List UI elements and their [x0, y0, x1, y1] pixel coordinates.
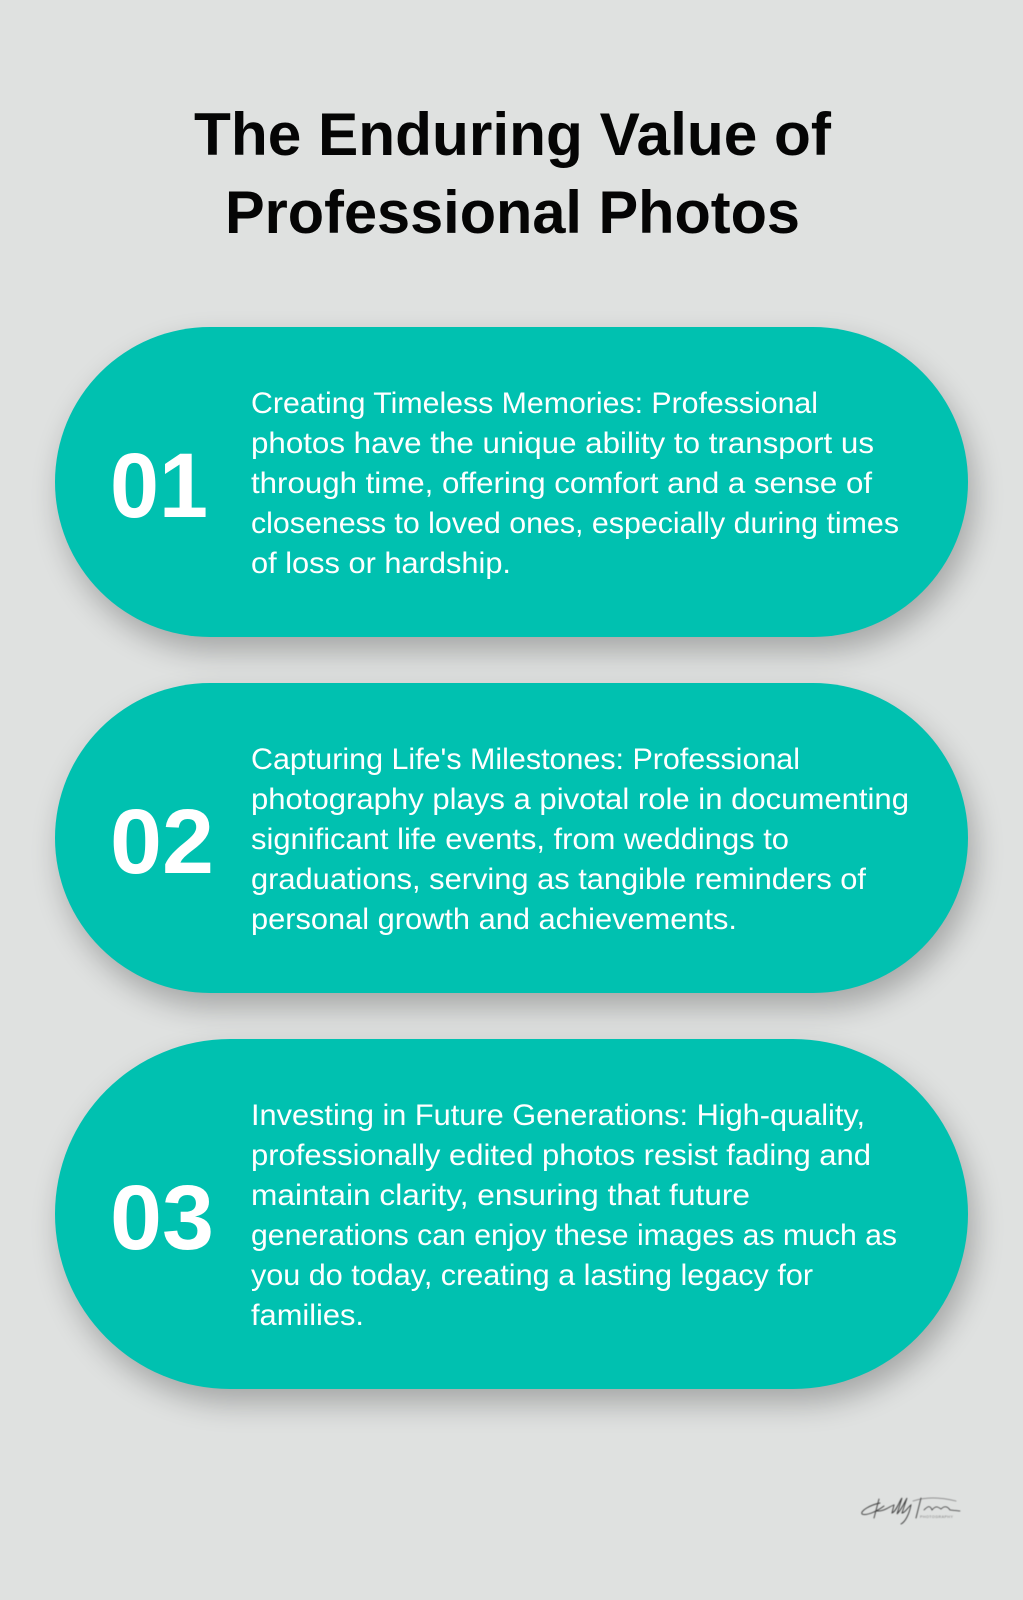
title: The Enduring Value of — [194, 101, 832, 168]
logo: signature — [862, 1498, 960, 1524]
text block: creating timeless memories: through time, offering comfort and a sense of — [251, 467, 873, 500]
text block: capturing life's milestones: significant life events, from weddings to — [251, 823, 789, 856]
number 03: 03 — [110, 1167, 214, 1269]
panel: creating timeless memories — [55, 327, 974, 651]
text block: capturing life's milestones — [251, 743, 909, 936]
text block: investing in future generations: professionally edited photos resist fading and — [251, 1139, 871, 1172]
panel: capturing life's milestones — [55, 683, 974, 1007]
text block: capturing life's milestones: graduations, serving as tangible reminders of — [251, 863, 867, 896]
text block: investing in future generations — [251, 1099, 897, 1332]
text block: investing in future generations: families. — [251, 1299, 364, 1332]
number 02: 02 — [110, 791, 214, 893]
text block: investing in future generations: you do today, creating a lasting legacy for — [251, 1259, 813, 1292]
text block: investing in future generations: generations can enjoy these images as much as — [251, 1219, 897, 1252]
text block: creating timeless memories: closeness to loved ones, especially during times — [251, 507, 899, 540]
text block: capturing life's milestones: photography plays a pivotal role in documenting — [251, 783, 909, 816]
text block: creating timeless memories — [251, 387, 899, 580]
text block: creating timeless memories: of loss or hardship. — [251, 547, 511, 580]
text block: creating timeless memories: Creating Timeless Memories: Professional — [251, 387, 818, 420]
text block: capturing life's milestones: personal growth and achievements. — [251, 903, 737, 936]
title — [194, 101, 832, 246]
text block: creating timeless memories: photos have the unique ability to transport us — [251, 427, 874, 460]
text block: investing in future generations: Investing in Future Generations: High-quality, — [251, 1099, 865, 1132]
text block: investing in future generations: maintain clarity, ensuring that future — [251, 1179, 750, 1212]
small wordmark: PHOTOGRAPHY — [920, 1515, 953, 1519]
title: Professional Photos — [225, 179, 800, 246]
number 01: 01 — [110, 435, 208, 537]
panel: investing in future generations — [55, 1039, 974, 1403]
text block: capturing life's milestones: Capturing Life's Milestones: Professional — [251, 743, 800, 776]
